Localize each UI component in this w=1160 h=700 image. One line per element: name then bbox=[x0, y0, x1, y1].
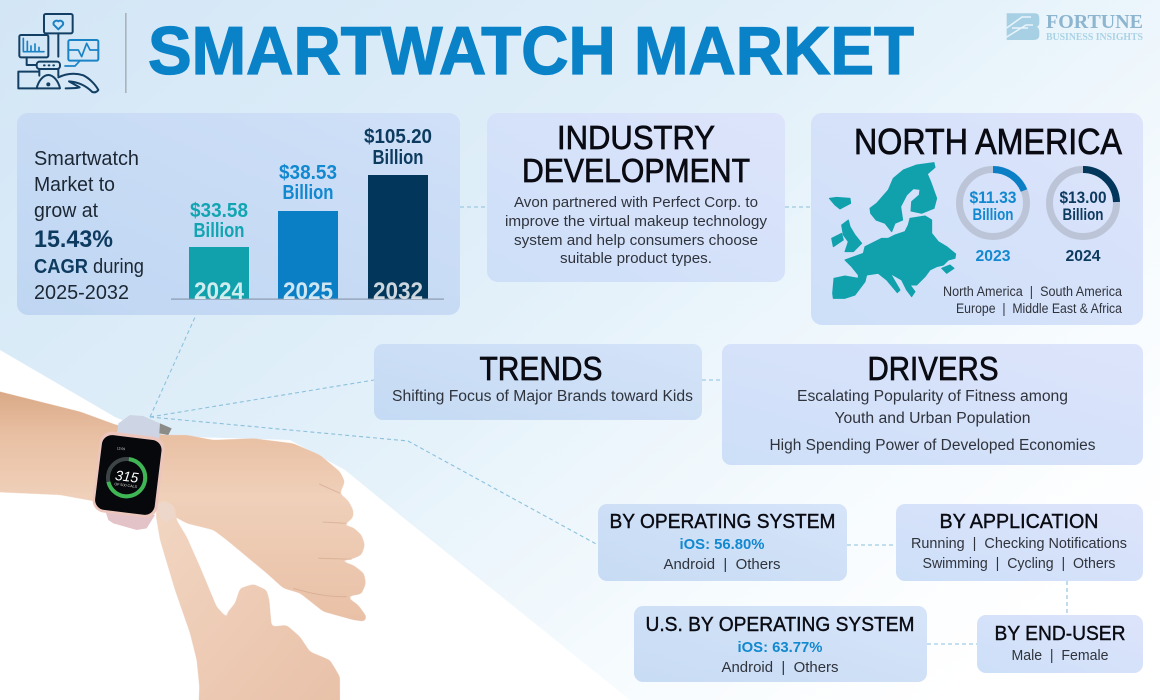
donut 2023 bbox=[960, 170, 1026, 265]
bar chart bbox=[171, 126, 444, 305]
panel: industry development: suitable product types. bbox=[560, 250, 712, 267]
panel: U.S. by operating system: Android | Others bbox=[722, 659, 838, 676]
region list bbox=[943, 284, 1122, 316]
panel: by operating system: BY OPERATING SYSTEM bbox=[610, 510, 836, 533]
watch band top bbox=[117, 415, 172, 443]
panel: industry development: DEVELOPMENT bbox=[522, 152, 750, 189]
bar chart: 2025 bbox=[283, 278, 333, 305]
bar chart: Billion bbox=[194, 220, 244, 242]
panel: drivers: Youth and Urban Population bbox=[834, 410, 1030, 427]
watch band bottom bbox=[105, 510, 155, 530]
panel: by operating system: Android | Others bbox=[664, 556, 780, 573]
map of Europe bbox=[829, 163, 956, 298]
pointing hand bbox=[156, 500, 340, 700]
logo: Fortune Business Insights: BUSINESS INSIGHTS bbox=[1046, 32, 1143, 43]
region list: North America | South America bbox=[943, 284, 1122, 299]
panel: by end-user: Male | Female bbox=[1012, 647, 1108, 664]
donut 2023: 2023 bbox=[976, 248, 1011, 265]
growth text: 15.43% bbox=[34, 226, 113, 253]
connector lines bbox=[150, 207, 1067, 644]
logo: Fortune Business Insights bbox=[1007, 11, 1143, 43]
donut 2024: $13.00 bbox=[1060, 188, 1106, 207]
bar chart: $33.58 bbox=[190, 200, 248, 222]
panel: by end-user: BY END-USER bbox=[994, 622, 1126, 645]
bar chart: Billion bbox=[372, 147, 424, 169]
watch case bbox=[91, 430, 166, 519]
panel: by end-user bbox=[977, 615, 1143, 673]
panel: trends: Shifting Focus of Major Brands toward Kids bbox=[392, 388, 693, 405]
arm and hand bbox=[0, 388, 367, 622]
activity ring: OF 500 CALS bbox=[114, 482, 138, 489]
panel: by operating system: iOS: 56.80% bbox=[680, 536, 764, 553]
panel: industry development bbox=[487, 113, 785, 282]
panel: industry development: Avon partnered with Perfect Corp. to bbox=[514, 194, 758, 211]
donut 2023: $11.33 bbox=[970, 188, 1016, 207]
panel: by application bbox=[896, 504, 1143, 581]
bar chart: $105.20 bbox=[364, 126, 432, 148]
panel: by application: Swimming | Cycling | Others bbox=[922, 555, 1116, 572]
panel: by operating system bbox=[598, 504, 847, 581]
panel: drivers: High Spending Power of Developed Economies bbox=[770, 437, 1096, 454]
panel: U.S. by operating system: U.S. BY OPERATING SYSTEM bbox=[646, 613, 914, 636]
panel: by application: Running | Checking Notifications bbox=[911, 535, 1127, 552]
panel: market growth bbox=[17, 113, 460, 315]
panel: trends bbox=[374, 344, 702, 420]
growth text: 2025-2032 bbox=[34, 281, 129, 304]
activity ring: 12:09 bbox=[117, 446, 125, 451]
growth text: Smartwatch bbox=[34, 147, 139, 170]
panel: regional bbox=[811, 113, 1143, 325]
donut 2024: Billion bbox=[1062, 205, 1104, 224]
header icon: smartwatch health monitoring bbox=[18, 14, 98, 92]
panel: by application: BY APPLICATION bbox=[940, 510, 1098, 533]
illustration: hand with smartwatch bbox=[0, 388, 367, 700]
header divider bbox=[125, 13, 127, 93]
panel: industry development: system and help consumers choose bbox=[514, 232, 758, 249]
panel: U.S. by operating system: iOS: 63.77% bbox=[738, 639, 822, 656]
activity ring: 315 bbox=[114, 467, 140, 486]
panel: regional: NORTH AMERICA bbox=[854, 121, 1122, 162]
fingernail bbox=[157, 501, 175, 523]
donut 2024: 2024 bbox=[1066, 248, 1101, 265]
panel: drivers bbox=[722, 344, 1143, 465]
panel: U.S. by operating system bbox=[634, 606, 927, 682]
growth text: grow at bbox=[34, 199, 98, 222]
growth text bbox=[34, 147, 144, 304]
bar chart: 2024 bbox=[194, 278, 245, 305]
region list: Europe | Middle East & Africa bbox=[956, 301, 1122, 316]
panel: industry development: improve the virtual makeup technology bbox=[505, 213, 767, 230]
logo: Fortune Business Insights: FORTUNE bbox=[1046, 11, 1143, 33]
bar chart: $38.53 bbox=[279, 162, 337, 184]
growth text: CAGR during bbox=[34, 255, 144, 278]
panel: drivers: DRIVERS bbox=[868, 350, 998, 387]
panel: trends: TRENDS bbox=[480, 350, 602, 387]
activity ring bbox=[106, 446, 149, 498]
knuckle creases bbox=[293, 484, 352, 597]
watch screen bbox=[94, 434, 163, 516]
panel: industry development: INDUSTRY bbox=[557, 119, 715, 156]
bar chart: 2032 bbox=[373, 278, 423, 305]
panel: drivers: Escalating Popularity of Fitness among bbox=[797, 388, 1068, 405]
donut 2023: Billion bbox=[972, 205, 1014, 224]
donut 2024 bbox=[1050, 169, 1116, 265]
title: SMARTWATCH MARKET bbox=[148, 13, 914, 89]
growth text: Market to bbox=[34, 173, 115, 196]
bar chart: Billion bbox=[282, 182, 334, 204]
